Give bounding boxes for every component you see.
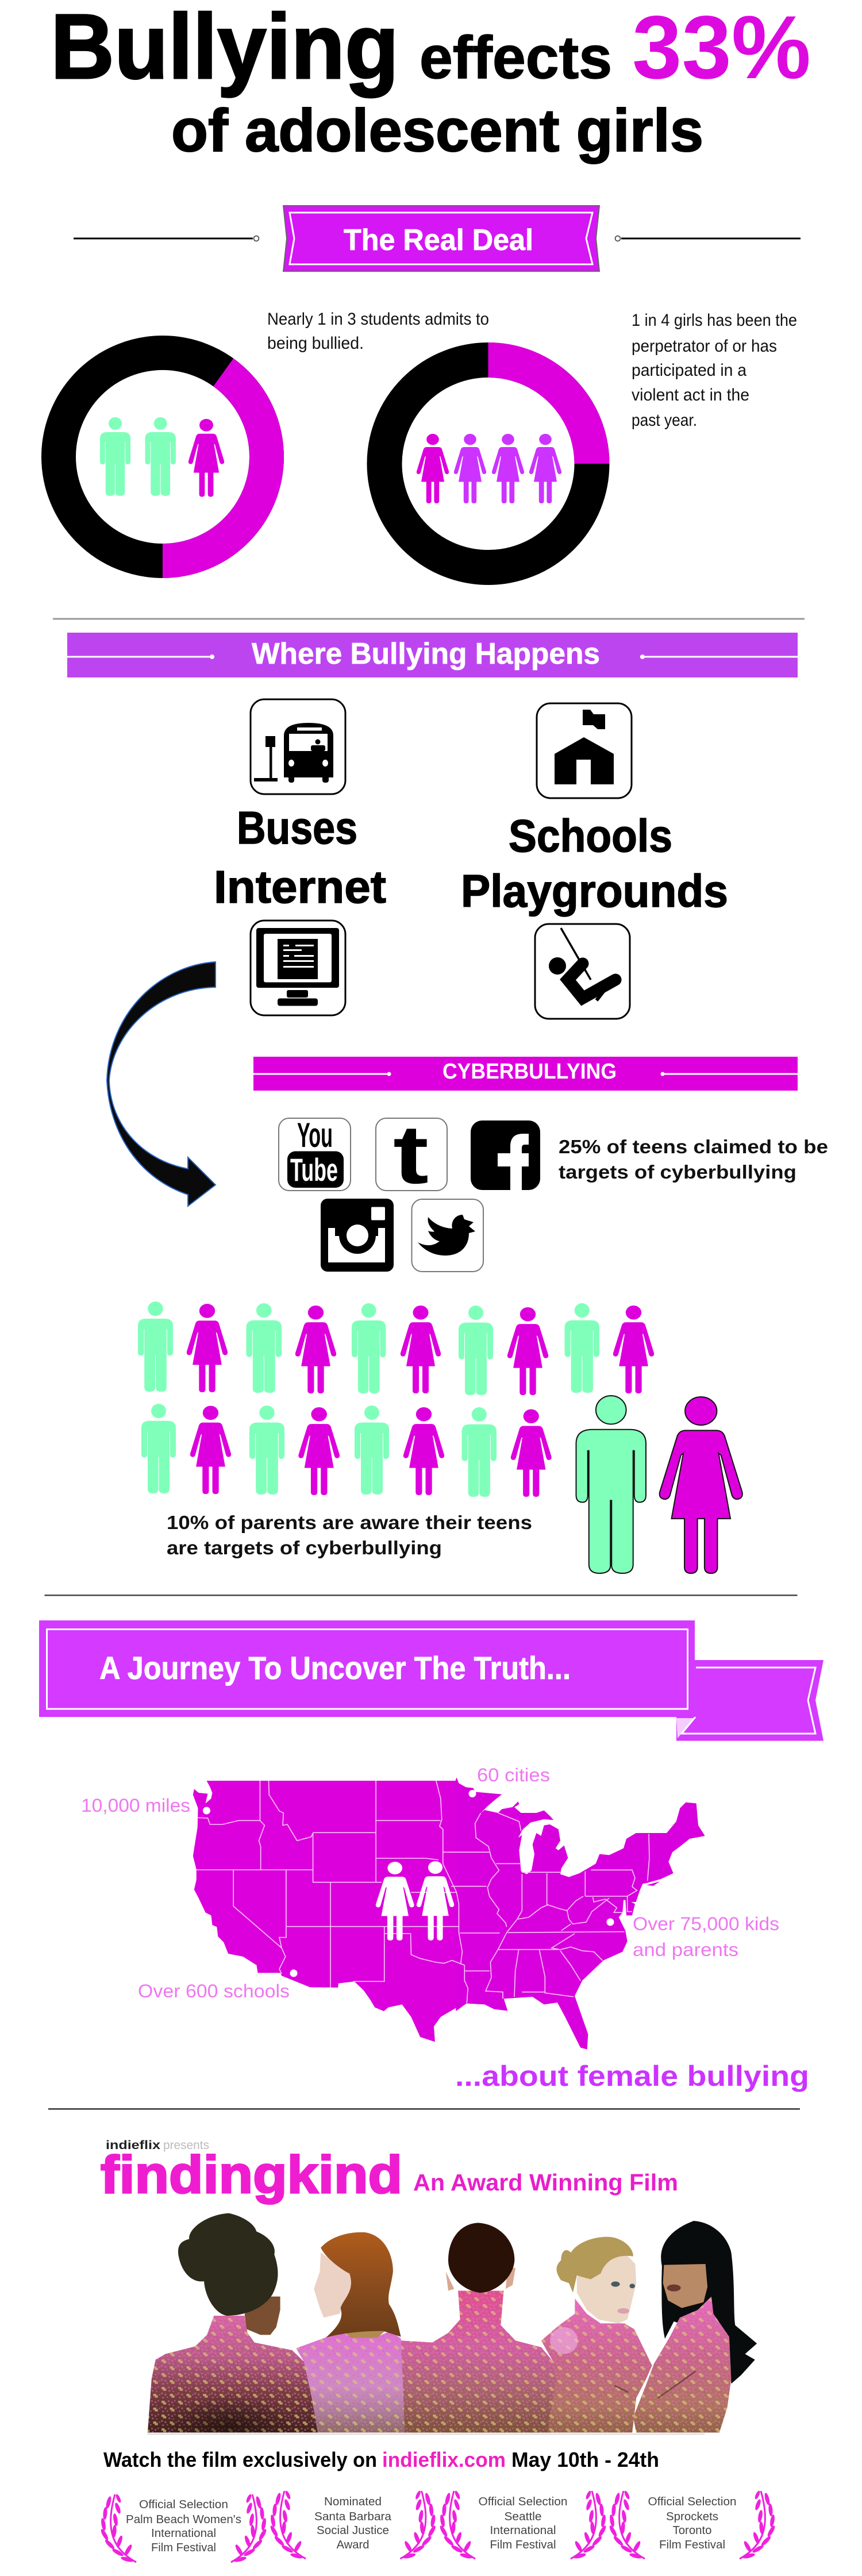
icon: bus <box>251 699 345 794</box>
icon: YouTube: Tube <box>290 1152 338 1188</box>
text: 1 in 4: violent act in the <box>632 386 749 405</box>
heading: Cyberbullying: CYBERBULLYING <box>442 1060 617 1084</box>
heading: A Journey To Uncover The Truth <box>39 1620 823 1741</box>
donut chart: 1 in 4 <box>384 342 609 568</box>
state borders west <box>197 1781 500 2003</box>
text: 1 in 4: past year. <box>632 411 697 430</box>
award: Sprockets Toronto <box>608 2490 776 2559</box>
icon: YouTube <box>279 1116 351 1191</box>
icon: Instagram <box>321 1199 394 1272</box>
map labels <box>81 1765 779 2001</box>
award text <box>314 2496 392 2551</box>
icon: Tumblr <box>376 1108 447 1201</box>
award text: Nominated <box>324 2496 382 2508</box>
laurels <box>438 2490 607 2559</box>
panel: 1 in 4 girls <box>384 311 797 568</box>
icon: two girls on map <box>376 1861 454 1940</box>
award text: Santa Barbara <box>314 2510 392 2523</box>
award text <box>478 2496 568 2551</box>
text: watch the film: Watch the film exclusively on <box>103 2448 377 2471</box>
film title block: indieflix <box>106 2139 160 2152</box>
text: watch the film: indieflix.com <box>382 2448 506 2471</box>
western states <box>193 1777 465 2042</box>
woman 3: back view <box>395 2223 556 2432</box>
award text: Film Festival <box>490 2539 556 2551</box>
text: 1 in 4: perpetrator of or has <box>632 337 777 356</box>
map labels: Over 75,000 kids <box>633 1913 779 1934</box>
map labels: and parents <box>633 1939 738 1960</box>
text: where bullying happens: Playgrounds <box>461 865 728 917</box>
map of the United States <box>193 1777 705 2050</box>
heading: Where Bullying Happens <box>67 633 798 677</box>
award text: Film Festival <box>151 2542 216 2554</box>
text: 1 in 4: participated in a <box>632 361 746 380</box>
text: where bullying happens <box>214 802 728 917</box>
award text: Official Selection <box>139 2498 228 2511</box>
text: 10% of parents: 10% of parents are aware their teens <box>167 1512 532 1533</box>
text: watch the film: May 10th - 24th <box>511 2448 659 2471</box>
icon: YouTube: You <box>297 1116 333 1154</box>
award: Seattle <box>438 2490 607 2559</box>
text: where bullying happens: Schools <box>509 810 672 861</box>
women 1 and 2 <box>148 2213 405 2432</box>
laurels <box>269 2490 437 2559</box>
film title block: findingkind <box>101 2146 402 2204</box>
text: 10% of parents <box>167 1512 532 1558</box>
state borders east <box>443 1813 649 1999</box>
map labels: 60 cities <box>477 1765 550 1785</box>
award text: Toronto <box>672 2524 711 2537</box>
award text: Sprockets <box>666 2510 718 2523</box>
map labels: 10,000 miles <box>81 1795 190 1816</box>
heading: Where Bullying Happens: Where Bullying Happens <box>252 637 600 671</box>
text: 1 in 4: 1 in 4 girls has been the <box>632 311 797 330</box>
text: 25% of teens: 25% of teens claimed to be <box>559 1136 828 1157</box>
text: about female bullying: ...about female bullying <box>455 2060 809 2092</box>
film title block: presents <box>163 2139 209 2152</box>
award text: Social Justice <box>317 2524 389 2537</box>
icon: swing <box>535 924 630 1019</box>
text: 10% of parents: are targets of cyberbullying <box>167 1537 442 1558</box>
award text: Official Selection <box>648 2496 737 2508</box>
icon: Facebook <box>471 1120 540 1190</box>
text: 1 in 3 <box>267 310 489 353</box>
film title block: An Award Winning Film <box>413 2169 678 2196</box>
arrow: internet to cyberbullying <box>107 962 216 1206</box>
award text <box>126 2498 241 2554</box>
icon: Tumblr: t <box>393 1108 429 1201</box>
award: Palm Beach Women's <box>99 2493 268 2563</box>
icon: school <box>537 703 632 798</box>
title: 33% <box>632 0 811 98</box>
woman 1: turban <box>148 2213 318 2432</box>
award text: International <box>151 2527 216 2540</box>
icon group: rows of teens <box>138 1302 654 1497</box>
text: watch the film <box>103 2448 659 2471</box>
text: 1 in 3: Nearly 1 in 3 students admits to <box>267 310 489 329</box>
donut chart: 1 in 3 <box>59 353 284 578</box>
title: effects <box>420 24 612 91</box>
icon: two boys and one girl <box>100 417 224 497</box>
panel: 1 in 3 students <box>59 310 489 578</box>
laurels <box>608 2490 776 2559</box>
women 3, 4 and 5 <box>395 2221 757 2432</box>
woman 2: red hair <box>296 2232 405 2432</box>
award text: Award <box>337 2539 369 2551</box>
icon: computer <box>251 921 345 1015</box>
film title block <box>101 2139 678 2204</box>
text: 25% of teens <box>559 1136 828 1183</box>
heading: The Real Deal: The Real Deal <box>344 224 533 257</box>
award text: Official Selection <box>478 2496 568 2508</box>
photo: five women with tattooed backs <box>147 2213 757 2435</box>
eastern states <box>456 1777 705 2050</box>
award: Santa Barbara <box>269 2490 437 2559</box>
location dots <box>203 1790 614 1977</box>
title: of adolescent girls <box>171 97 703 164</box>
heading: A Journey To Uncover The Truth: A Journey To Uncover The Truth... <box>99 1650 571 1686</box>
icon: Twitter <box>411 1199 483 1272</box>
text: 25% of teens: targets of cyberbullying <box>559 1161 796 1183</box>
award text: Palm Beach Women's <box>126 2513 241 2526</box>
laurels <box>99 2493 268 2563</box>
map labels: Over 600 schools <box>138 1981 290 2001</box>
award text <box>648 2496 737 2551</box>
text: where bullying happens: Buses <box>237 802 357 853</box>
icon: large man <box>576 1396 646 1573</box>
woman 4: blonde <box>541 2237 652 2432</box>
award text: Seattle <box>505 2510 541 2523</box>
icon: large woman <box>660 1397 742 1573</box>
icon: four girls <box>417 434 561 503</box>
heading: The Real Deal <box>74 206 801 271</box>
heading: Cyberbullying <box>253 1057 798 1091</box>
title <box>51 0 811 164</box>
award text: International <box>490 2524 556 2537</box>
text: 1 in 4 <box>632 311 797 430</box>
award text: Film Festival <box>659 2539 725 2551</box>
text: 1 in 3: being bullied. <box>267 334 364 353</box>
woman 5: black hair <box>614 2221 757 2432</box>
text: where bullying happens: Internet <box>214 861 386 912</box>
